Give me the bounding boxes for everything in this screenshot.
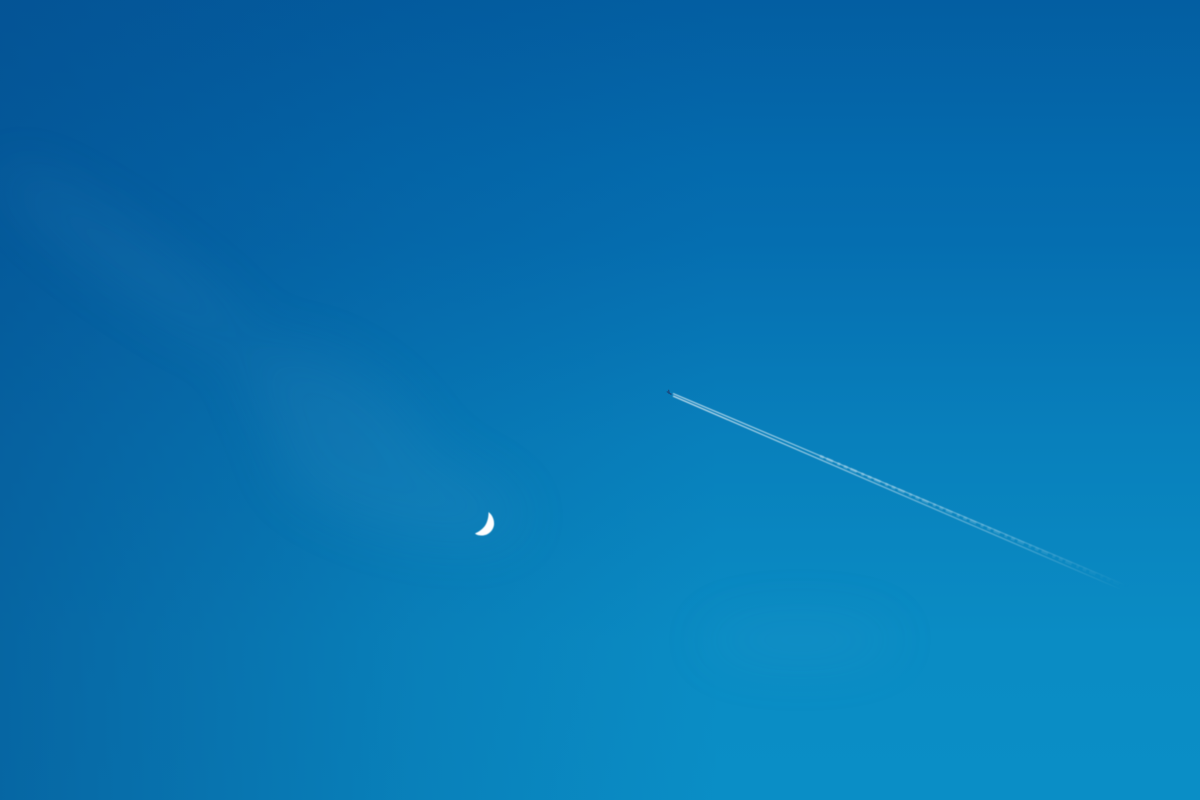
contrail	[673, 394, 1130, 589]
faint high cloud	[0, 144, 900, 665]
aircraft	[666, 390, 672, 395]
crescent moon	[475, 512, 494, 536]
